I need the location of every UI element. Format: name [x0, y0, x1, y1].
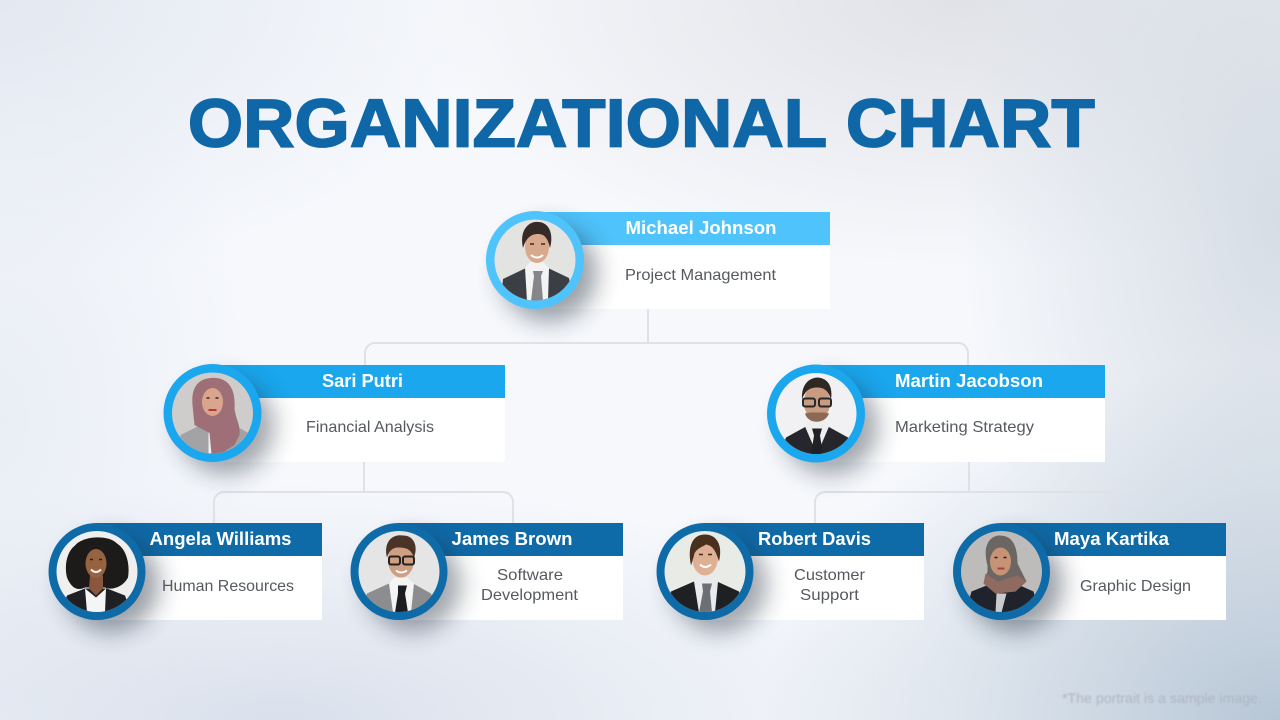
- title: ORGANIZATIONAL CHART: [188, 85, 1095, 161]
- circle shadow: [178, 378, 274, 474]
- card: Michael Johnson: [486, 211, 830, 321]
- portrait: Maya Kartika: [960, 530, 1042, 612]
- portrait: James Brown: [358, 530, 440, 612]
- circle shadow: [782, 378, 878, 474]
- card: Martin Jacobson: [767, 364, 1105, 474]
- portrait ring: [486, 211, 584, 309]
- name: James Brown: [452, 528, 572, 549]
- card: James Brown: [350, 523, 623, 632]
- department: Human Resources: [162, 578, 294, 595]
- connector lines: [214, 309, 1115, 523]
- department: Customer: [794, 567, 866, 584]
- department: Development: [481, 587, 579, 604]
- circle shadow: [671, 536, 767, 632]
- card: Sari Putri: [164, 364, 505, 474]
- portrait: Angela Williams: [56, 530, 138, 612]
- department: Financial Analysis: [306, 419, 434, 436]
- card body: [399, 523, 623, 620]
- name: Sari Putri: [322, 370, 403, 391]
- portrait ring: [953, 523, 1050, 620]
- name header: [816, 365, 1105, 398]
- circle shadow: [967, 536, 1063, 632]
- name: Michael Johnson: [626, 217, 776, 238]
- name header: [212, 365, 505, 398]
- portrait ring: [656, 523, 754, 620]
- portrait: Michael Johnson: [494, 219, 576, 301]
- card body: [97, 523, 322, 620]
- name: Angela Williams: [150, 528, 292, 549]
- portrait: Robert Davis: [664, 530, 746, 612]
- name: Maya Kartika: [1054, 528, 1170, 549]
- portrait: Sari Putri: [172, 372, 254, 454]
- portrait ring: [164, 364, 262, 462]
- footnote: *The portrait is a sample image.: [1062, 690, 1262, 706]
- card body: [1001, 523, 1226, 620]
- name header: [97, 523, 322, 556]
- department: Graphic Design: [1080, 578, 1191, 595]
- card body: [535, 212, 830, 309]
- name header: [535, 212, 830, 245]
- card: Maya Kartika: [953, 523, 1226, 632]
- circle shadow: [365, 536, 461, 632]
- name: Robert Davis: [758, 528, 871, 549]
- circle shadow: [63, 536, 159, 632]
- name header: [705, 523, 924, 556]
- department: Software: [497, 567, 563, 584]
- portrait ring: [767, 364, 865, 462]
- name header: [399, 523, 623, 556]
- department: Support: [800, 587, 860, 604]
- card body: [705, 523, 924, 620]
- portrait ring: [48, 523, 146, 620]
- card body: [816, 365, 1105, 462]
- card: Robert Davis: [656, 523, 924, 632]
- department: Marketing Strategy: [895, 419, 1034, 436]
- portrait ring: [350, 523, 448, 620]
- card: Angela Williams: [48, 523, 322, 632]
- department: Project Management: [625, 267, 777, 284]
- name: Martin Jacobson: [895, 370, 1043, 391]
- circle shadow: [501, 225, 597, 321]
- card body: [212, 365, 505, 462]
- portrait: Martin Jacobson: [775, 372, 857, 454]
- name header: [1001, 523, 1226, 556]
